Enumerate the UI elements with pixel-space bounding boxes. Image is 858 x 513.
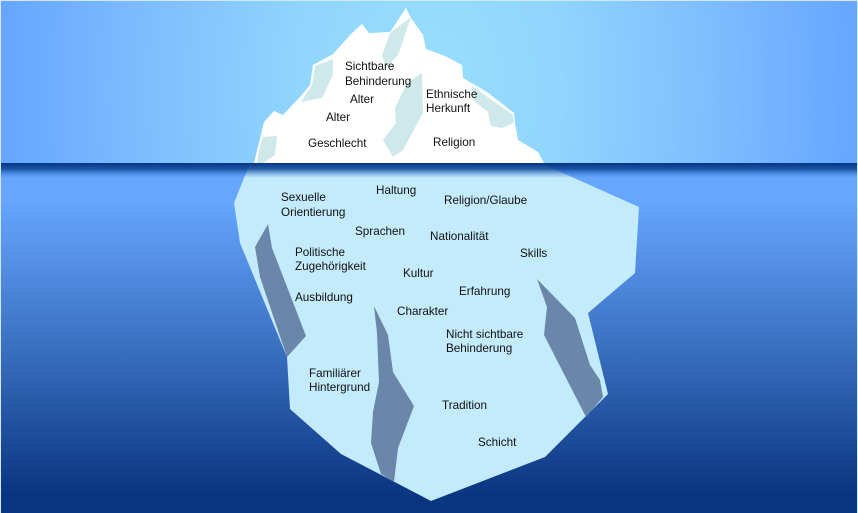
labels below water: Sexuelle <box>281 191 326 204</box>
labels below water: Politische <box>295 246 345 259</box>
labels below water: Nationalität <box>430 230 489 243</box>
shard: far left <box>257 136 277 163</box>
labels above water <box>308 60 477 150</box>
labels below water: Religion/Glaube <box>444 194 527 207</box>
sea background <box>0 163 858 513</box>
labels below water: Sprachen <box>355 225 405 238</box>
iceberg: visible part above water <box>254 8 544 163</box>
shard: centre <box>383 73 423 157</box>
labels above water: Alter <box>350 93 374 106</box>
labels below water: Skills <box>520 247 547 260</box>
labels below water: Schicht <box>478 436 517 449</box>
labels below water: Hintergrund <box>309 381 370 394</box>
labels below water: Charakter <box>397 305 448 318</box>
sky background <box>0 0 858 163</box>
shard: right <box>472 86 514 128</box>
labels above water: Alter <box>326 111 350 124</box>
labels below water: Kultur <box>403 267 434 280</box>
shard: right submerged <box>537 279 603 417</box>
labels above water: Ethnische <box>426 88 477 101</box>
labels above water: Behinderung <box>345 75 411 88</box>
iceberg: submerged part <box>234 163 639 501</box>
labels below water: Behinderung <box>446 342 512 355</box>
labels above water: Religion <box>433 136 475 149</box>
labels below water: Tradition <box>442 399 487 412</box>
labels above water: Geschlecht <box>308 137 367 150</box>
shard: left submerged <box>255 224 306 357</box>
labels below water: Ausbildung <box>295 291 353 304</box>
waterline shadow band <box>0 163 858 178</box>
labels below water: Zugehörigkeit <box>295 260 367 273</box>
labels below water <box>281 184 547 449</box>
shard: summit <box>382 17 411 68</box>
labels below water: Haltung <box>376 184 416 197</box>
shard: centre submerged <box>371 306 414 482</box>
shard: upper left <box>301 59 333 102</box>
labels above water: Sichtbare <box>345 60 394 73</box>
labels below water: Orientierung <box>281 206 345 219</box>
labels above water: Herkunft <box>426 102 471 115</box>
labels below water: Familiärer <box>309 367 361 380</box>
labels below water: Erfahrung <box>459 285 510 298</box>
labels below water: Nicht sichtbare <box>446 328 523 341</box>
